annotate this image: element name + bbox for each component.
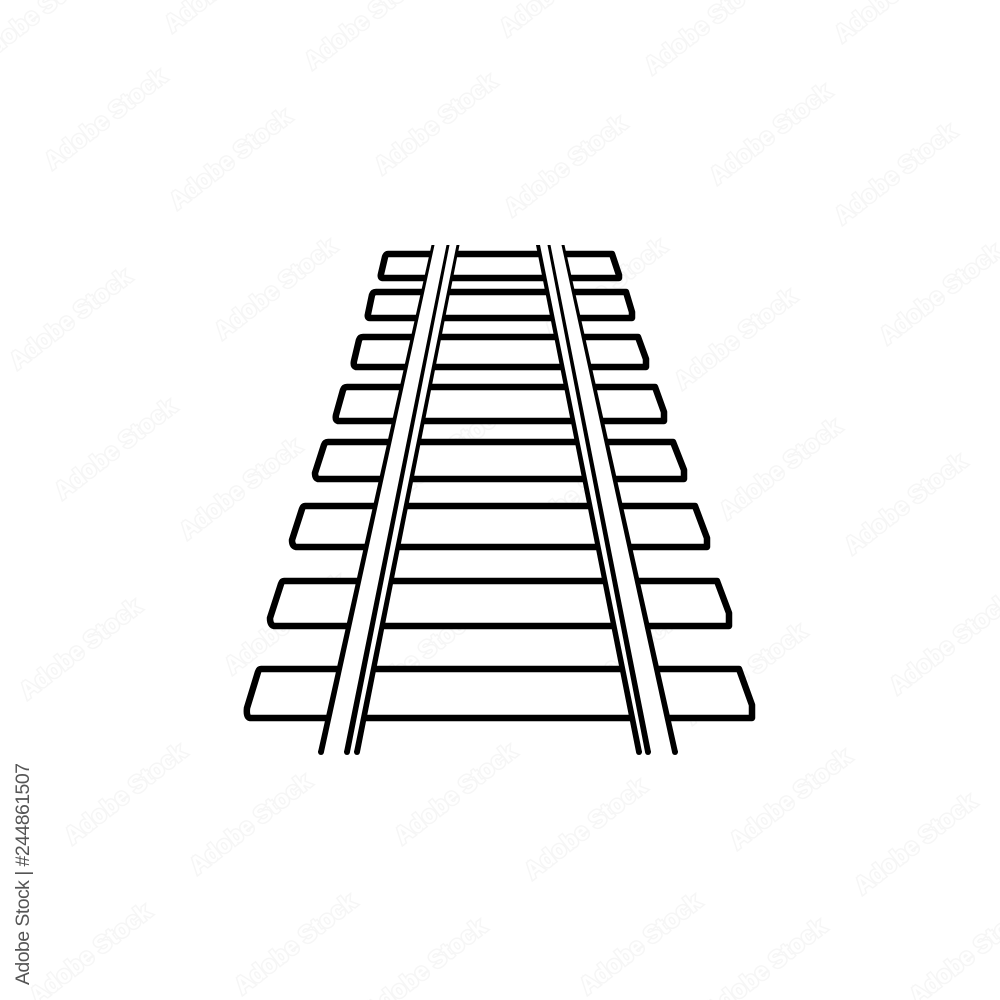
watermark pattern: Adobe Stock bbox=[669, 283, 802, 395]
watermark pattern: Adobe Stock bbox=[164, 103, 297, 215]
left rail bbox=[318, 245, 460, 755]
railway track illustration bbox=[247, 245, 752, 755]
sleeper 7 bbox=[270, 581, 729, 626]
watermark pattern: Adobe Stock bbox=[229, 888, 362, 1000]
watermark pattern: Adobe Stock bbox=[14, 593, 147, 705]
watermark pattern: Adobe Stock bbox=[724, 743, 857, 855]
watermark pattern: Adobe Stock bbox=[539, 233, 672, 345]
watermark pattern: Adobe Stock bbox=[679, 618, 812, 730]
watermark pattern: Adobe Stock bbox=[829, 118, 962, 230]
watermark pattern: Adobe Stock bbox=[574, 888, 707, 1000]
watermark pattern: Adobe Stock bbox=[219, 568, 352, 680]
watermark pattern: Adobe Stock bbox=[704, 78, 837, 190]
right rail bbox=[536, 245, 678, 755]
watermark pattern: Adobe Stock bbox=[49, 393, 182, 505]
watermark pattern: Adobe Stock bbox=[349, 603, 482, 715]
sleeper 4 bbox=[336, 387, 664, 421]
sleeper 8 bbox=[247, 669, 752, 718]
watermark pattern: Adobe Stock bbox=[549, 608, 682, 720]
watermark pattern: Adobe Stock bbox=[39, 63, 172, 175]
watermark pattern: Adobe Stock bbox=[184, 768, 317, 880]
watermark pattern: Adobe Stock bbox=[379, 398, 512, 510]
vertical stock credit: Adobe Stock | #244861507 bbox=[12, 763, 34, 985]
watermark pattern: Adobe Stock bbox=[839, 448, 972, 560]
watermark pattern: Adobe Stock bbox=[509, 438, 642, 550]
watermark pattern: Adobe Stock bbox=[714, 413, 847, 525]
watermark pattern: Adobe Stock bbox=[499, 110, 632, 222]
sleeper 6 bbox=[292, 506, 707, 547]
watermark pattern: Adobe Stock bbox=[209, 233, 342, 345]
sleeper 2 bbox=[368, 292, 632, 318]
watermark pattern: Adobe Stock bbox=[369, 68, 502, 180]
watermark pattern: Adobe Stock bbox=[519, 773, 652, 885]
watermark pattern: Adobe Stock bbox=[389, 738, 522, 850]
watermark pattern: Adobe Stock bbox=[59, 738, 192, 850]
sleeper 1 bbox=[381, 254, 619, 278]
watermark pattern: Adobe Stock bbox=[849, 788, 982, 900]
watermark pattern: Adobe Stock bbox=[4, 263, 137, 375]
watermark pattern: Adobe Stock bbox=[174, 433, 307, 545]
sleeper 3 bbox=[354, 337, 646, 367]
sleeper 5 bbox=[315, 442, 684, 479]
